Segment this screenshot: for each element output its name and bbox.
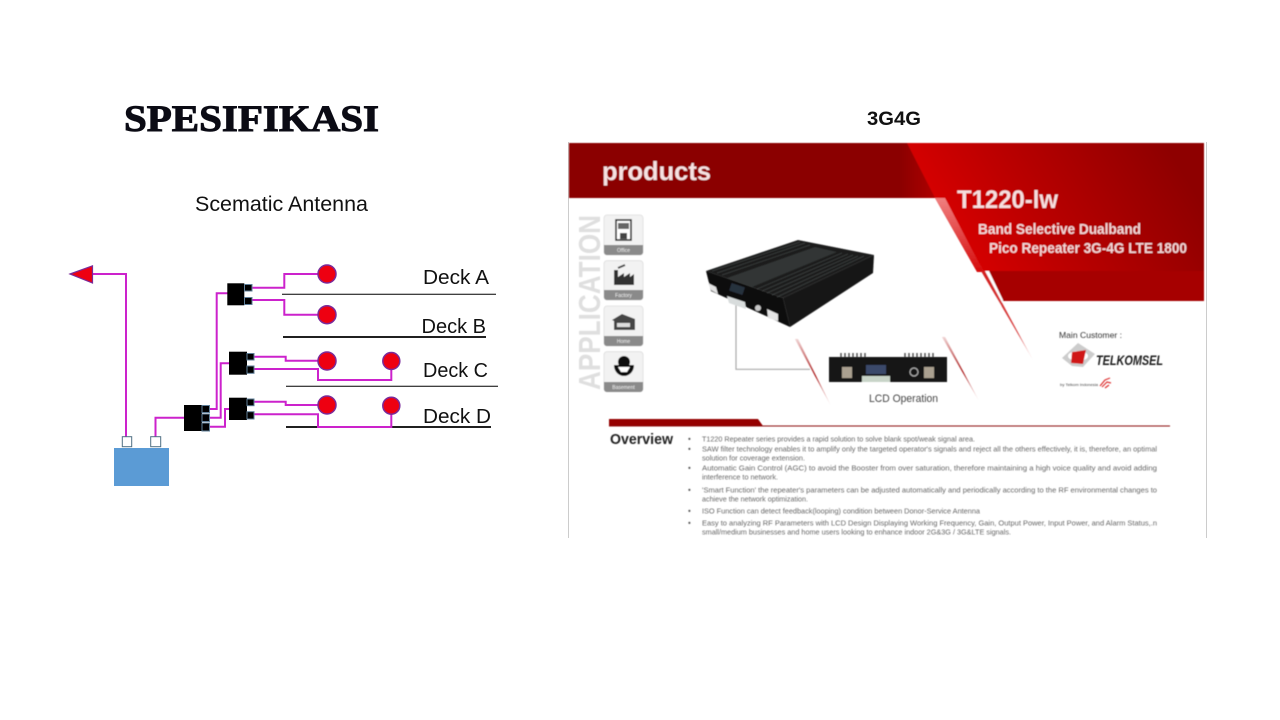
chart: antenna schematic (70, 265, 498, 486)
cables (93, 274, 391, 437)
icon: donor antenna (70, 266, 92, 283)
device photo (706, 240, 874, 327)
overview bullets: • (688, 518, 691, 528)
deck labels: Deck B (422, 315, 486, 338)
overview bullets (688, 434, 1157, 536)
splitter: deck C (229, 352, 254, 375)
customer label: Main Customer : (1059, 330, 1122, 340)
overview bullets: Easy to analyzing RF Parameters with LCD Design Displaying Working Frequency, Gain, Output Power, Input Power, and Alarm Status,.n (702, 518, 1157, 528)
overview bullets: • (688, 506, 691, 516)
red accent streaks (795, 337, 979, 406)
deck labels: Deck C (423, 359, 488, 382)
heading: model: T1220-lw (957, 186, 1059, 214)
LCD panel photo (829, 353, 947, 382)
overview bullets: interference to network. (702, 472, 778, 482)
caption: LCD operation: LCD Operation (869, 393, 938, 405)
icon: factory: Factory (615, 293, 632, 299)
overview bullets: 'Smart Function' the repeater's parameters can be adjusted automatically and periodically according to the RF environmental changes to (702, 486, 1157, 494)
icon: home: Home (617, 339, 630, 345)
panel: product sheet (568, 142, 1207, 538)
divider bar (609, 419, 1170, 426)
connector line (736, 303, 810, 369)
logo: Telkomsel: TELKOMSEL (1096, 352, 1163, 368)
icon: basement: Basement (612, 385, 635, 391)
overview bullets: • (688, 486, 691, 494)
splitter: decks A and B (227, 283, 252, 305)
overview bullets: small/medium businesses and home users looking to enhance indoor 2G&3G / 3G&LTE signals. (702, 528, 1011, 536)
deck labels: Deck A (423, 266, 489, 289)
icon: office (604, 215, 643, 255)
icon: home (604, 306, 643, 346)
header band (569, 143, 939, 198)
heading: products: products (602, 156, 711, 186)
logo: Telkomsel (1060, 343, 1163, 388)
icon: factory (604, 261, 643, 300)
overview bullets: T1220 Repeater series provides a rapid solution to solve blank spot/weak signal area. (702, 434, 975, 444)
vertical label: application: APPLICATION (573, 215, 607, 390)
subtitle (978, 221, 1187, 257)
icon: office: Office (617, 248, 630, 254)
overview bullets: • (688, 434, 691, 444)
deck labels: Deck D (423, 405, 491, 428)
subtitle: Band Selective Dualband (978, 221, 1141, 238)
deck labels (422, 266, 491, 428)
overview bullets: solution for coverage extension. (702, 454, 805, 462)
heading: 3G4G: 3G4G (867, 109, 921, 130)
heading: schematic antenna: Scematic Antenna (195, 193, 368, 216)
service antennas (318, 265, 400, 414)
overview bullets: ISO Function can detect feedback(looping) condition between Donor-Service Antenna (702, 506, 981, 516)
deck floor lines (282, 294, 498, 427)
main splitter (184, 405, 210, 431)
overview bullets: • (688, 444, 691, 454)
icon: basement (604, 352, 643, 392)
overview bullets: achieve the network optimization. (702, 494, 808, 504)
splitter: deck D (229, 398, 254, 420)
red banner (895, 143, 1204, 360)
overview bullets: • (688, 464, 691, 472)
title: SPESIFIKASI (124, 99, 379, 140)
logo: Telkomsel: by Telkom Indonesia (1060, 382, 1099, 387)
overview bullets: SAW filter technology enables it to amplify only the targeted operator's signals and reject all the others effectively, it is, therefore, an optimal (702, 444, 1157, 454)
subtitle: Pico Repeater 3G-4G LTE 1800 (989, 240, 1187, 257)
heading: overview: Overview (610, 432, 674, 448)
repeater unit (114, 437, 169, 486)
overview bullets: Automatic Gain Control (AGC) to avoid the Booster from over saturation, therefore maintaining a high voice quality and avoid adding (702, 464, 1157, 472)
